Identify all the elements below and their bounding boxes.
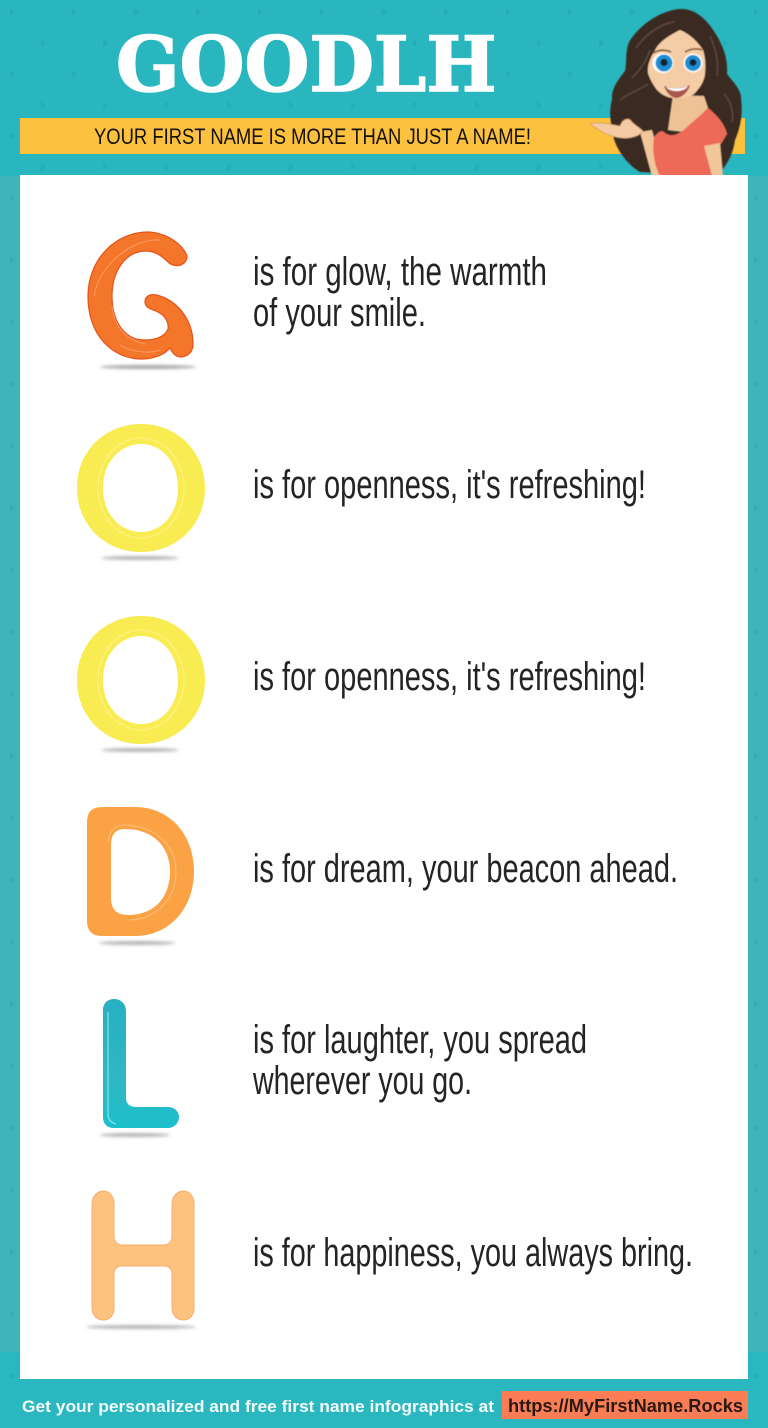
letter G bbox=[88, 232, 196, 369]
text: L: wherever you go. bbox=[252, 1059, 472, 1103]
banner text: YOUR FIRST NAME IS MORE THAN JUST A NAME! bbox=[94, 124, 531, 149]
text: G: of your smile. bbox=[253, 291, 426, 335]
letter O bbox=[77, 424, 205, 560]
illustration: woman with long brown hair bbox=[590, 9, 742, 176]
other arm bbox=[704, 143, 723, 176]
mouth bbox=[664, 85, 690, 98]
banner bbox=[20, 118, 745, 154]
letter O bbox=[77, 616, 205, 752]
text: L bbox=[252, 1018, 587, 1103]
letter L bbox=[100, 999, 179, 1137]
letter D bbox=[87, 807, 194, 945]
face bbox=[648, 30, 705, 98]
footer link: https://MyFirstName.Rocks bbox=[508, 1396, 743, 1416]
text: G: is for glow, the warmth bbox=[253, 250, 547, 294]
eyes bbox=[652, 49, 702, 73]
text: G bbox=[253, 250, 547, 335]
panel: white content bbox=[20, 175, 748, 1379]
letter H bbox=[86, 1191, 196, 1329]
arm bbox=[640, 130, 664, 176]
neck bbox=[668, 95, 708, 132]
text: L: is for laughter, you spread bbox=[253, 1018, 587, 1062]
shirt bbox=[653, 108, 727, 176]
footer text: Get your personalized and free first name infographics at bbox=[22, 1397, 494, 1416]
title: GOODLH bbox=[116, 19, 497, 109]
hand bbox=[590, 119, 643, 138]
footer link bbox=[502, 1391, 748, 1419]
